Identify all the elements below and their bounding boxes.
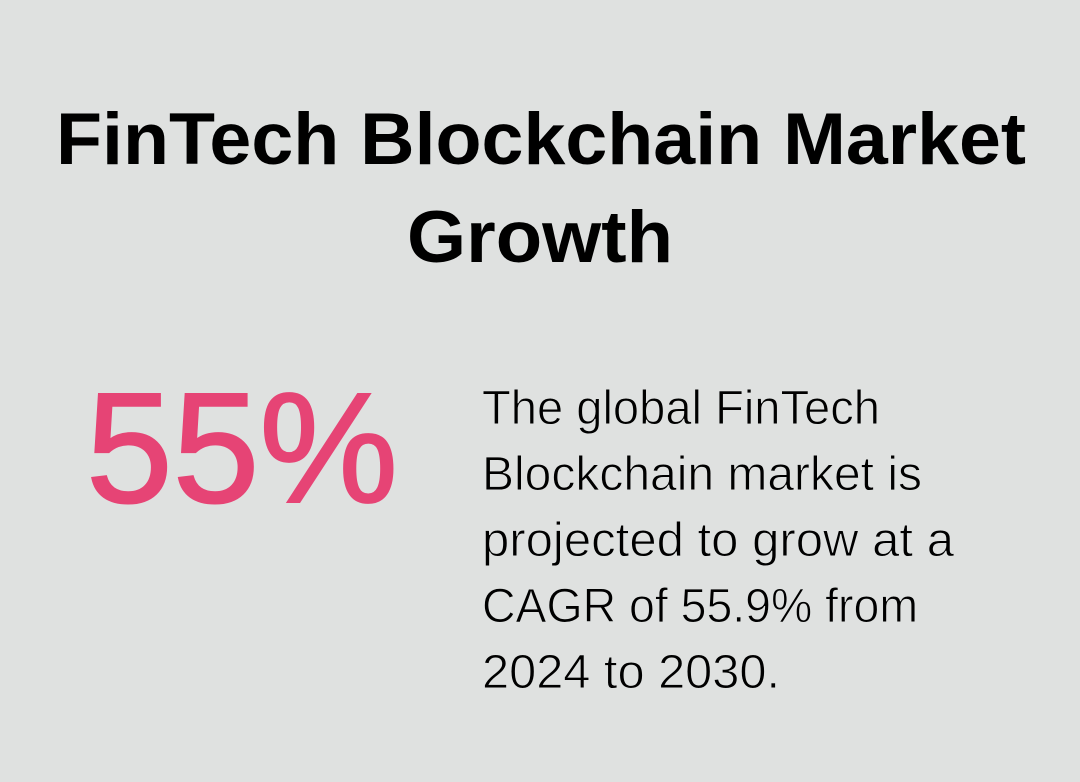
title <box>56 99 1026 278</box>
description text <box>482 382 954 699</box>
title: Growth <box>407 197 673 278</box>
statistic: 55%: 55% <box>86 361 398 536</box>
description text: CAGR of 55.9% from <box>482 580 918 633</box>
description text: 2024 to 2030. <box>482 646 780 699</box>
description text: The global FinTech <box>482 382 880 435</box>
description text: projected to grow at a <box>482 514 954 567</box>
description text: Blockchain market is <box>482 448 922 501</box>
title: FinTech Blockchain Market <box>56 99 1026 180</box>
